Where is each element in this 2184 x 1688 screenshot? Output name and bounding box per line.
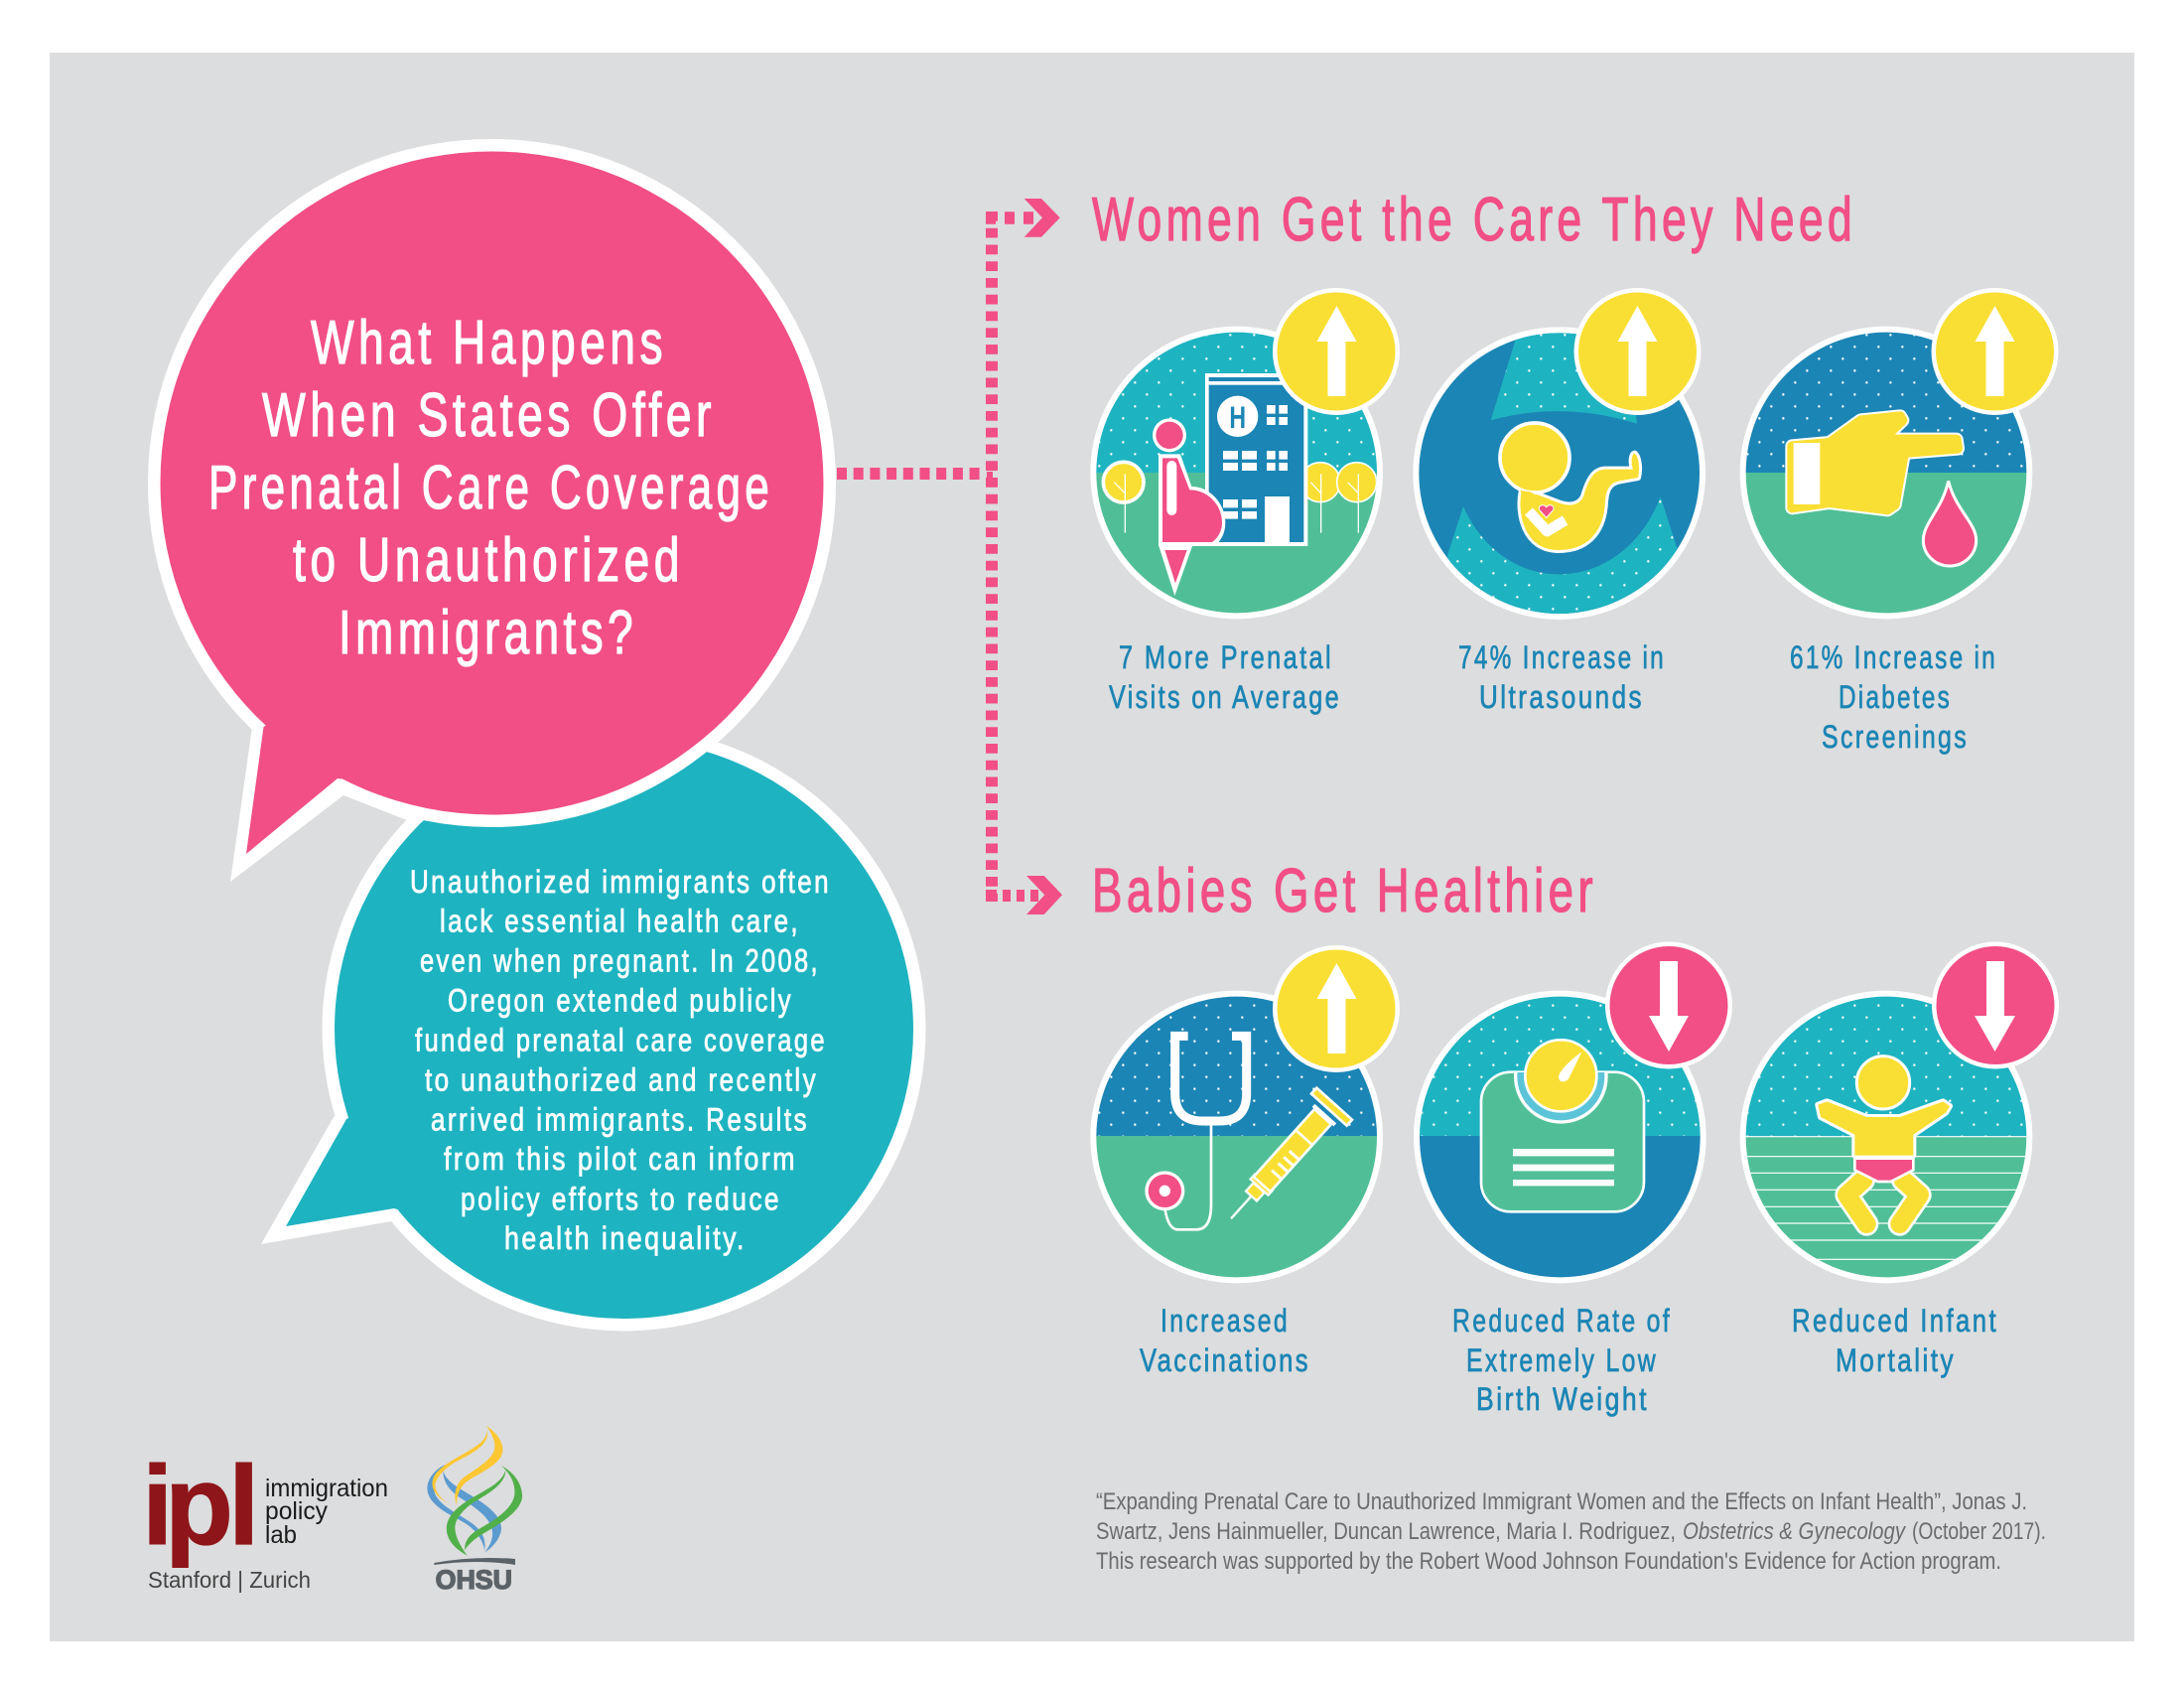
pink speech bubble with main title — [148, 139, 836, 882]
logo: immigration policy lab: immigration — [265, 1475, 388, 1502]
label: 74% increase in ultrasounds — [1458, 639, 1666, 715]
title: to Unauthorized — [293, 526, 684, 595]
teal speech bubble with context text — [261, 727, 925, 1331]
title: When States Offer — [262, 381, 716, 450]
logo: immigration policy lab: lab — [265, 1521, 297, 1549]
title: Prenatal Care Coverage — [208, 454, 773, 522]
logo: immigration policy lab: Stanford | Zurich — [148, 1567, 311, 1593]
label: reduced rate of extremely low birth weight: Birth Weight — [1476, 1381, 1649, 1417]
citation text: Swartz, Jens Hainmueller, Duncan Lawrence, Maria I. Rodriguez, — [1096, 1518, 1676, 1545]
teal speech bubble with context text: arrived immigrants. Results — [431, 1102, 809, 1138]
teal speech bubble with context text: Oregon extended publicly — [448, 983, 793, 1019]
badge: up arrow, diabetes screenings — [1932, 288, 2059, 415]
label: increased vaccinations: Vaccinations — [1140, 1342, 1310, 1378]
teal speech bubble with context text: from this pilot can inform — [444, 1141, 797, 1177]
logo: immigration policy lab: policy — [265, 1497, 328, 1525]
label: 74% increase in ultrasounds: 74% Increase in — [1458, 639, 1666, 675]
label: 74% increase in ultrasounds: Ultrasounds — [1479, 679, 1644, 715]
label: reduced infant mortality: Reduced Infant — [1792, 1303, 1998, 1338]
label: reduced infant mortality: Mortality — [1836, 1342, 1956, 1378]
citation text — [1096, 1488, 2046, 1575]
citation text: (October 2017). — [1912, 1518, 2046, 1545]
label: 61% increase in diabetes screenings: 61% Increase in — [1790, 639, 1997, 675]
label: 61% increase in diabetes screenings — [1790, 639, 1997, 755]
teal speech bubble with context text: policy efforts to reduce — [461, 1182, 781, 1217]
icon: infant scale — [1410, 983, 1717, 1288]
citation text: Obstetrics & Gynecology — [1683, 1518, 1907, 1545]
citation text: This research was supported by the Robert Wood Johnson Foundation's Evidence for Action program. — [1096, 1548, 2001, 1575]
teal speech bubble with context text: funded prenatal care coverage — [415, 1023, 827, 1058]
citation text: “Expanding Prenatal Care to Unauthorized Immigrant Women and the Effects on Infant Health”, Jonas J. — [1096, 1488, 2027, 1515]
title — [208, 309, 773, 667]
icon: pregnant woman and hospital — [1087, 318, 1395, 622]
label: 61% increase in diabetes screenings: Screenings — [1822, 719, 1969, 755]
title: Immigrants? — [339, 599, 637, 667]
icon: hand pricking finger, blood drop — [1735, 318, 2043, 622]
label: reduced infant mortality — [1792, 1303, 1998, 1378]
logo: OHSU — [427, 1426, 522, 1595]
logo: immigration policy lab — [142, 1443, 388, 1593]
title: What Happens — [311, 309, 667, 377]
icon: baby — [1735, 983, 2043, 1289]
badge: up arrow, vaccinations — [1273, 945, 1400, 1072]
logo: OHSU: OHSU — [436, 1565, 512, 1595]
label: reduced rate of extremely low birth weight: Reduced Rate of — [1452, 1303, 1672, 1338]
label: 7 more prenatal visits: Visits on Average — [1109, 679, 1341, 715]
logo: immigration policy lab: ipl — [142, 1443, 259, 1568]
teal speech bubble with context text: Unauthorized immigrants often — [410, 864, 831, 900]
heading: Women Get the Care They Need: Women Get the Care They Need — [1092, 186, 1856, 254]
icon: fetus on ultrasound — [1410, 318, 1717, 626]
teal speech bubble with context text: health inequality. — [504, 1220, 747, 1256]
label: 61% increase in diabetes screenings: Diabetes — [1839, 679, 1952, 715]
teal speech bubble with context text: even when pregnant. In 2008, — [420, 943, 820, 979]
connector: dotted lines and arrows — [837, 199, 1062, 914]
label: 7 more prenatal visits — [1109, 639, 1341, 715]
badge: down arrow, low birth weight — [1605, 941, 1732, 1068]
label: increased vaccinations: Increased — [1160, 1303, 1290, 1338]
badge: up arrow, prenatal visits — [1273, 288, 1400, 415]
badge: up arrow, ultrasounds — [1574, 288, 1702, 415]
label: reduced rate of extremely low birth weight: Extremely Low — [1466, 1342, 1658, 1378]
icon: stethoscope and syringe — [1087, 983, 1395, 1288]
label: reduced rate of extremely low birth weight — [1452, 1303, 1672, 1417]
label: 7 more prenatal visits: 7 More Prenatal — [1119, 639, 1333, 675]
teal speech bubble with context text: lack essential health care, — [440, 904, 800, 939]
badge: down arrow, infant mortality — [1932, 941, 2059, 1068]
heading: Babies Get Healthier: Babies Get Healthier — [1092, 857, 1597, 925]
icon: pregnant woman and hospital: H — [1229, 400, 1246, 435]
label: increased vaccinations — [1140, 1303, 1310, 1378]
teal speech bubble with context text: to unauthorized and recently — [425, 1062, 818, 1098]
